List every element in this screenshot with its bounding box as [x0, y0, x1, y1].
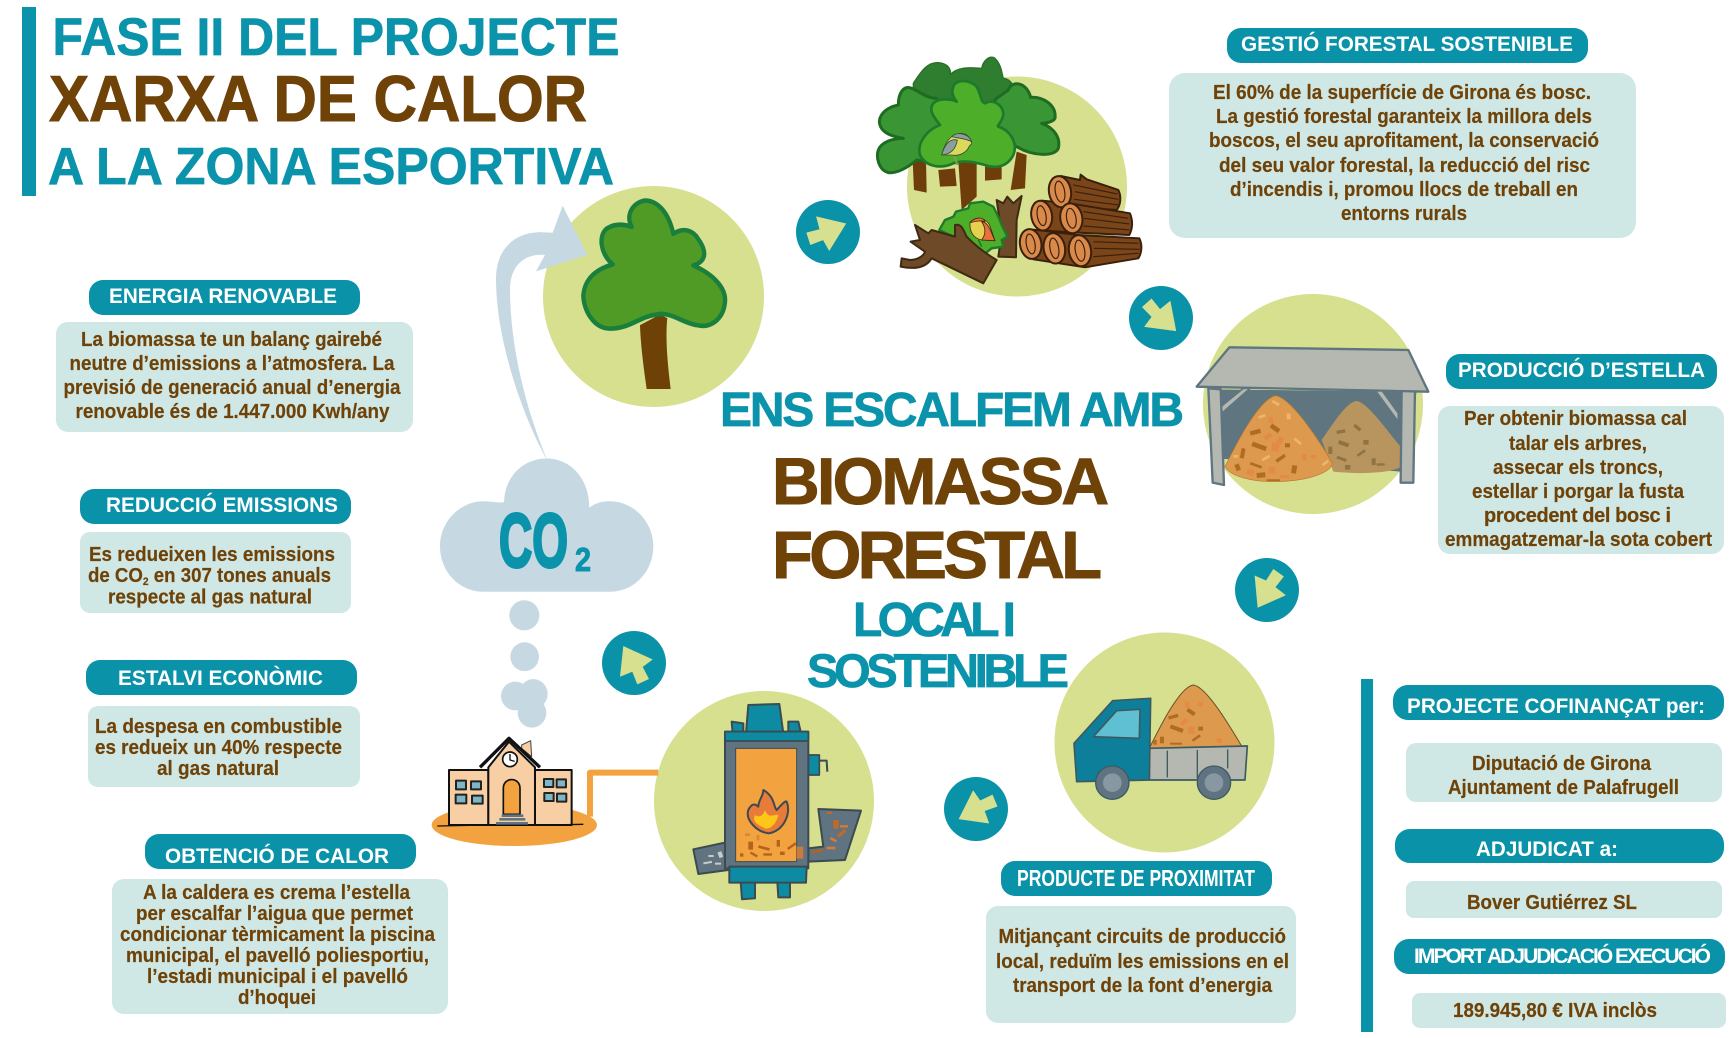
panel: gestió forestal sostenible: El 60% de la superfície de Girona és bosc. [1213, 82, 1591, 104]
panel: producció d'estella: estellar i porgar la fusta [1472, 481, 1685, 503]
panel: estalvi econòmic: al gas natural [157, 758, 279, 780]
panel: finançament i adjudicació [1361, 679, 1726, 1032]
title block: A LA ZONA ESPORTIVA [48, 138, 614, 196]
arrow: boiler to cloud [602, 631, 666, 695]
panel: producció d'estella: assecar els troncs, [1493, 457, 1663, 479]
panel: finançament i adjudicació: IMPORT ADJUDICACIÓ EXECUCIÓ [1414, 944, 1711, 968]
panel: gestió forestal sostenible: La gestió forestal garanteix la millora dels [1216, 106, 1592, 128]
icon: forest and logs in circle [877, 57, 1141, 296]
log pile [1018, 174, 1141, 268]
panel: finançament i adjudicació: Bover Gutiérrez SL [1467, 892, 1637, 914]
central heading: ENS ESCALFEM AMB [720, 384, 1184, 437]
panel: finançament i adjudicació: ADJUDICAT a: [1476, 838, 1618, 861]
panel: finançament i adjudicació: Diputació de Girona [1472, 753, 1652, 775]
bush, stump and fallen log [901, 196, 1022, 283]
panel: energia renovable [56, 280, 413, 432]
title block: FASE II DEL PROJECTE [52, 8, 620, 67]
panel: producció d'estella: PRODUCCIÓ D’ESTELLA [1458, 358, 1705, 382]
panel: energia renovable: ENERGIA RENOVABLE [109, 285, 337, 308]
panel: reducció emissions: 2 [143, 576, 149, 588]
icon: co2 cloud with arrow to tree [440, 206, 653, 728]
panel: obtenció de calor: per escalfar l’aigua que permet [136, 903, 413, 925]
central heading: LOCAL I [853, 594, 1016, 647]
central heading: BIOMASSA [772, 444, 1109, 518]
panel: obtenció de calor [112, 834, 448, 1014]
panel: reducció emissions: respecte al gas natural [108, 586, 312, 608]
panel: producció d'estella: emmagatzemar-la sota cobert [1445, 529, 1712, 551]
panel: gestió forestal sostenible: GESTIÓ FORESTAL SOSTENIBLE [1241, 32, 1573, 56]
central heading [720, 384, 1184, 697]
arrow: forest to shed [1129, 286, 1193, 350]
panel: estalvi econòmic: es redueix un 40% respecte [95, 737, 342, 759]
panel: gestió forestal sostenible [1169, 28, 1636, 238]
panel: obtenció de calor: municipal, el pavelló poliesportiu, [126, 945, 429, 967]
panel: obtenció de calor: A la caldera es crema l’estella [143, 882, 411, 904]
arrow: truck to boiler [944, 777, 1008, 841]
panel: finançament i adjudicació: 189.945,80 € IVA inclòs [1453, 1000, 1657, 1022]
panel: energia renovable: previsió de generació anual d’energia [64, 377, 401, 399]
panel: estalvi econòmic [86, 660, 360, 787]
panel: gestió forestal sostenible: boscos, el seu aprofitament, la conservació [1209, 130, 1599, 152]
panel: producte de proximitat [986, 861, 1296, 1023]
panel: reducció emissions: REDUCCIÓ EMISSIONS [106, 493, 338, 517]
panel: obtenció de calor: l’estadi municipal i el pavelló [147, 966, 408, 988]
icon: co2 cloud with arrow to tree: CO [499, 499, 568, 584]
panel: reducció emissions: de CO [88, 565, 147, 587]
panel: producció d'estella [1438, 354, 1724, 554]
icon: tree in circle [543, 186, 764, 407]
panel: gestió forestal sostenible: entorns rurals [1341, 203, 1467, 225]
panel: obtenció de calor: d’hoquei [238, 987, 316, 1009]
panel: gestió forestal sostenible: d’incendis i, promou llocs de treball en [1230, 179, 1578, 201]
icon: biomass boiler [654, 691, 874, 911]
panel: producció d'estella: procedent del bosc i [1484, 505, 1671, 527]
panel: finançament i adjudicació: PROJECTE COFINANÇAT per: [1407, 695, 1705, 718]
icon: grey bird [942, 133, 972, 165]
wood chips [1234, 424, 1297, 481]
panel: producte de proximitat: Mitjançant circuits de producció [998, 926, 1286, 948]
arrow: tree to forest [796, 200, 860, 264]
burning chips [740, 812, 848, 859]
panel: reducció emissions [80, 489, 351, 613]
panel: producció d'estella: Per obtenir biomassa cal [1464, 408, 1687, 430]
title block [22, 7, 620, 196]
central heading: SOSTENIBLE [807, 644, 1069, 697]
icon: truck with wood chips [1054, 632, 1274, 852]
tree canopies [877, 57, 1059, 173]
icon: storage shed with wood chips [1197, 294, 1428, 514]
panel: producció d'estella: talar els arbres, [1509, 433, 1647, 455]
panel: producte de proximitat: local, reduïm les emissions en el [996, 951, 1289, 973]
icon: school building on orange ground with heat pipe [432, 738, 658, 846]
panel: reducció emissions: Es redueixen les emissions [89, 544, 335, 566]
panel: estalvi econòmic: La despesa en combustible [95, 716, 342, 738]
panel: energia renovable: La biomassa te un balanç gairebé [81, 329, 382, 351]
panel: estalvi econòmic: ESTALVI ECONÒMIC [118, 666, 323, 690]
panel: energia renovable: renovable és de 1.447.000 Kwh/any [76, 401, 390, 423]
icon: co2 cloud with arrow to tree: 2 [575, 541, 591, 578]
panel: reducció emissions: en 307 tones anuals [149, 565, 331, 587]
panel: finançament i adjudicació: Ajuntament de Palafrugell [1448, 777, 1679, 799]
back tree trunks [913, 152, 1027, 210]
panel: producte de proximitat: transport de la font d’energia [1013, 975, 1273, 997]
panel: obtenció de calor: condicionar tèrmicament la piscina [120, 924, 436, 946]
panel: obtenció de calor: OBTENCIÓ DE CALOR [165, 844, 389, 868]
central heading: FORESTAL [772, 518, 1102, 593]
panel: gestió forestal sostenible: del seu valor forestal, la reducció del risc [1219, 155, 1590, 177]
title block: XARXA DE CALOR [49, 62, 587, 135]
panel: producte de proximitat: PRODUCTE DE PROXIMITAT [1017, 865, 1255, 891]
icon: orange bird [970, 218, 995, 247]
arrow: shed to truck [1235, 558, 1299, 622]
panel: energia renovable: neutre d’emissions a l’atmosfera. La [70, 353, 395, 375]
